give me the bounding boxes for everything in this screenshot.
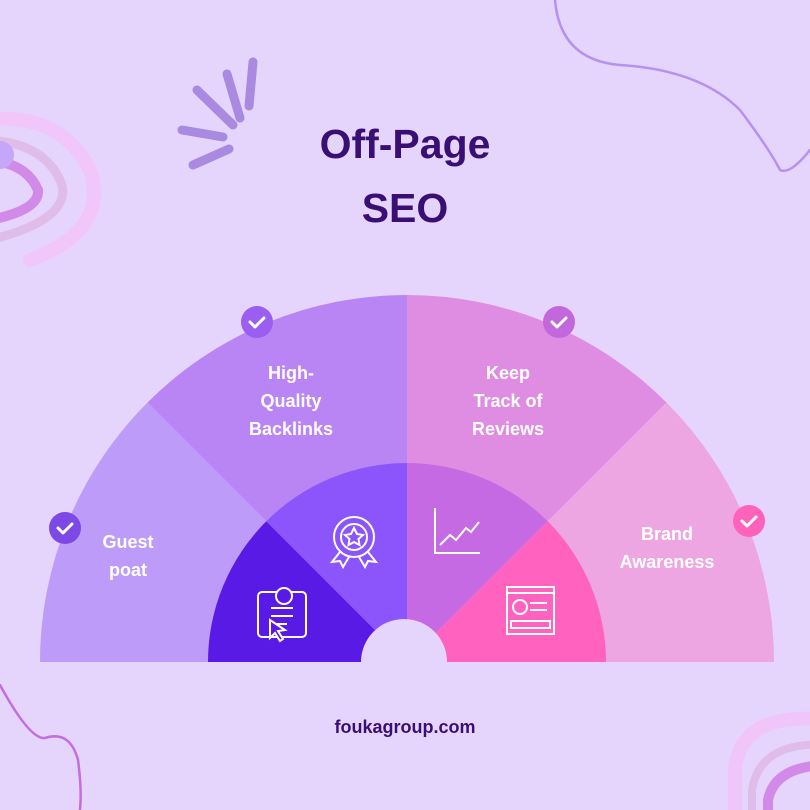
label: backlinks: Backlinks bbox=[249, 419, 333, 439]
checkmarks bbox=[49, 306, 765, 544]
title: SEO bbox=[362, 185, 448, 231]
label: reviews: Track of bbox=[473, 391, 543, 411]
label: guest post: Guest bbox=[102, 532, 154, 552]
label: brand awareness: Brand bbox=[641, 524, 693, 544]
title bbox=[320, 121, 490, 231]
label: reviews bbox=[472, 363, 544, 439]
label: reviews: Reviews bbox=[472, 419, 544, 439]
label: guest post: poat bbox=[109, 560, 147, 580]
label: brand awareness bbox=[620, 524, 714, 572]
icons bbox=[258, 508, 554, 641]
label: guest post bbox=[102, 532, 154, 580]
label: backlinks: Quality bbox=[260, 391, 322, 411]
title: Off-Page bbox=[320, 121, 490, 167]
footer url: foukagroup.com bbox=[334, 717, 476, 737]
label: backlinks: High- bbox=[268, 363, 314, 383]
label: brand awareness: Awareness bbox=[620, 552, 714, 572]
label: reviews: Keep bbox=[486, 363, 530, 383]
label: backlinks bbox=[249, 363, 333, 439]
semicircle chart bbox=[0, 295, 810, 705]
icon: burst lines bbox=[182, 62, 253, 165]
